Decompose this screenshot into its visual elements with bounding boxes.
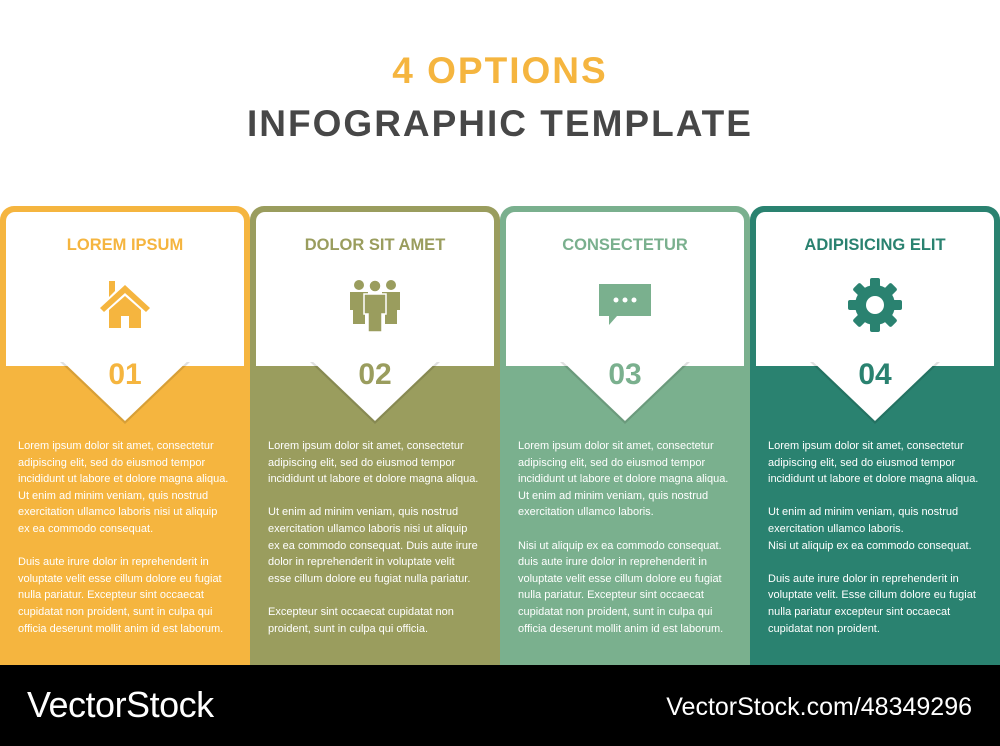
text 3: incididunt ut labore et dolore magna aliqua. xyxy=(518,473,728,485)
text 2: esse cillum dolore eu fugiat nulla pariatur. xyxy=(268,573,470,585)
text 1: incididunt ut labore et dolore magna aliqua. xyxy=(18,473,228,485)
icon: people xyxy=(350,280,400,332)
footer bar xyxy=(0,665,1000,746)
text 1: exercitation ullamco laboris nisi ut aliquip xyxy=(18,506,217,518)
text 3: exercitation ullamco laboris. xyxy=(518,506,654,518)
text 4: Lorem ipsum dolor sit amet, consectetur xyxy=(768,440,964,452)
number 02: 02 xyxy=(358,358,392,391)
text 2: adipiscing elit, sed do eiusmod tempor xyxy=(268,457,455,469)
arrow marker xyxy=(310,362,440,424)
subtitle: INFOGRAPHIC TEMPLATE xyxy=(247,103,753,144)
footer id: VectorStock.com/48349296 xyxy=(666,693,972,721)
text 2 xyxy=(268,440,478,635)
panel: option 1 xyxy=(0,206,250,665)
title: 4 OPTIONS xyxy=(392,50,608,91)
text 4: Ut enim ad minim veniam, quis nostrud xyxy=(768,506,958,518)
text 4: incididunt ut labore et dolore magna aliqua. xyxy=(768,473,978,485)
text 1: adipiscing elit, sed do eiusmod tempor xyxy=(18,457,205,469)
text 2: dolor in reprehenderit in voluptate velit xyxy=(268,556,455,568)
text 1: voluptate velit esse cillum dolore eu fugiat xyxy=(18,573,222,585)
text 4: Duis aute irure dolor in reprehenderit in xyxy=(768,573,959,585)
text 3: officia deserunt mollit anim id est laborum. xyxy=(518,623,723,635)
text 3: duis aute irure dolor in reprehenderit in xyxy=(518,556,707,568)
text 2: proident, sunt in culpa qui officia. xyxy=(268,623,428,635)
text 2: Ut enim ad minim veniam, quis nostrud xyxy=(268,506,458,518)
text 4: adipiscing elit, sed do eiusmod tempor xyxy=(768,457,955,469)
text 3: cupidatat non proident, sunt in culpa qui xyxy=(518,606,712,618)
text 1: cupidatat non proident, sunt in culpa qui xyxy=(18,606,212,618)
arrow marker xyxy=(810,362,940,424)
text 1: ex ea commodo consequat. xyxy=(18,523,153,535)
text 1: Duis aute irure dolor in reprehenderit in xyxy=(18,556,209,568)
arrow marker xyxy=(560,362,690,424)
text 3: Nisi ut aliquip ex ea commodo consequat. xyxy=(518,540,722,552)
text 4 xyxy=(768,440,978,635)
text 2: Excepteur sint occaecat cupidatat non xyxy=(268,606,454,618)
text 3: voluptate velit esse cillum dolore eu fugiat xyxy=(518,573,722,585)
icon: house xyxy=(100,281,150,328)
text 2: Lorem ipsum dolor sit amet, consectetur xyxy=(268,440,464,452)
heading 4: ADIPISICING ELIT xyxy=(804,236,946,254)
panel: option 3 xyxy=(500,206,750,665)
number 04: 04 xyxy=(858,358,892,391)
text 1: Ut enim ad minim veniam, quis nostrud xyxy=(18,490,208,502)
text 2: incididunt ut labore et dolore magna aliqua. xyxy=(268,473,478,485)
number 03: 03 xyxy=(608,358,642,391)
number 01: 01 xyxy=(108,358,142,391)
text 1 xyxy=(18,440,228,635)
text 2: ex ea commodo consequat. Duis aute irure xyxy=(268,540,478,552)
footer brand: VectorStock xyxy=(27,684,214,725)
text 4: nulla pariatur excepteur sint occaecat xyxy=(768,606,950,618)
text 1: officia deserunt mollit anim id est laborum. xyxy=(18,623,223,635)
text 2: exercitation ullamco laboris nisi ut aliquip xyxy=(268,523,467,535)
icon: chat xyxy=(599,284,651,325)
panel: option 2 xyxy=(250,206,500,665)
text 3: Lorem ipsum dolor sit amet, consectetur xyxy=(518,440,714,452)
text 3: adipiscing elit, sed do eiusmod tempor xyxy=(518,457,705,469)
arrow marker xyxy=(60,362,190,424)
text 1: Lorem ipsum dolor sit amet, consectetur xyxy=(18,440,214,452)
text 4: voluptate velit. Esse cillum dolore eu fugiat xyxy=(768,589,976,601)
text 1: nulla pariatur. Excepteur sint occaecat xyxy=(18,589,204,601)
heading 2: DOLOR SIT AMET xyxy=(305,236,445,254)
text 4: cupidatat non proident. xyxy=(768,623,880,635)
heading 1: LOREM IPSUM xyxy=(67,236,183,254)
icon: gear xyxy=(848,278,902,332)
text 4: Nisi ut aliquip ex ea commodo consequat. xyxy=(768,540,972,552)
text 4: exercitation ullamco laboris. xyxy=(768,523,904,535)
panel: option 4 xyxy=(750,206,1000,665)
text 3: Ut enim ad minim veniam, quis nostrud xyxy=(518,490,708,502)
text 3 xyxy=(518,440,728,635)
text 3: nulla pariatur. Excepteur sint occaecat xyxy=(518,589,704,601)
heading 3: CONSECTETUR xyxy=(562,236,688,254)
